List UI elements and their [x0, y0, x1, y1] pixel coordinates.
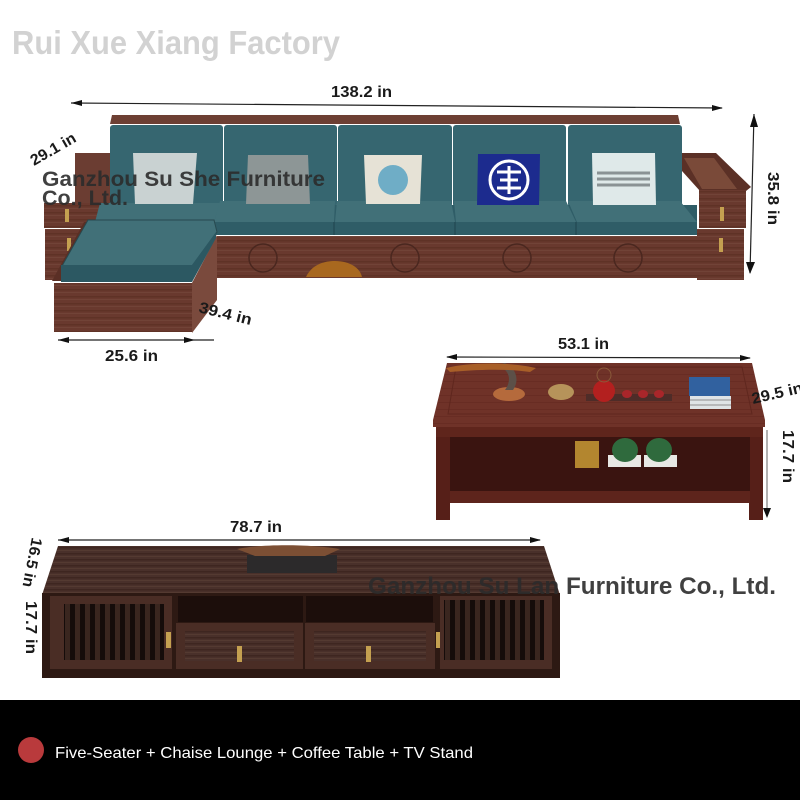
pillows — [133, 153, 656, 205]
stand top — [42, 546, 560, 595]
decorative shrub — [306, 261, 362, 277]
dimension: table depth: 29.5 in — [750, 380, 800, 408]
shelf objects — [575, 438, 677, 468]
tabletop objects — [446, 363, 731, 409]
watermark: Su She: Co., Ltd. — [42, 186, 128, 210]
watermark: Su She: Ganzhou Su She Furniture — [42, 167, 325, 191]
dimension: sofa height — [746, 114, 781, 274]
drawers — [166, 623, 441, 669]
sofa top rail — [110, 115, 680, 124]
left side table — [44, 153, 110, 280]
dimension: sofa depth: 29.1 in — [28, 130, 79, 169]
title: Rui Xue Xiang Factory — [12, 24, 341, 61]
seat cushions — [95, 201, 697, 235]
dimension: stand width — [58, 519, 541, 543]
coffee table — [433, 363, 765, 520]
decorative tray — [237, 545, 340, 573]
watermark: Su Lan: Ganzhou Su Lan Furniture Co., Ltd. — [368, 573, 776, 600]
watermark: Su She — [42, 167, 325, 210]
dimension: chaise width — [58, 337, 214, 365]
dimension: stand height: 17.7 in — [22, 601, 39, 654]
set description: Five-Seater + Chaise Lounge + Coffee Table + TV Stand — [55, 745, 473, 762]
dimension: sofa width: 138.2 in — [331, 84, 392, 101]
base medallions — [108, 244, 642, 323]
table top — [433, 363, 765, 427]
dimension: stand depth: 16.5 in — [19, 536, 45, 589]
stand front — [42, 593, 560, 678]
left door — [50, 596, 172, 669]
dimension: table width — [446, 336, 751, 361]
sofa illustration — [44, 115, 751, 333]
sofa wood base — [217, 236, 697, 278]
dimension: table width: 53.1 in — [558, 336, 609, 353]
right door — [440, 596, 552, 669]
right side table — [682, 153, 751, 280]
dimension: stand width: 78.7 in — [230, 519, 282, 536]
red dot — [18, 737, 44, 763]
dimension: chaise width: 25.6 in — [105, 348, 158, 365]
open compartments — [178, 596, 433, 622]
TV stand — [42, 545, 560, 678]
chaise lounge — [52, 220, 217, 333]
dimension: table height: 17.7 in — [779, 430, 796, 483]
dimension: chaise length: 39.4 in — [197, 299, 254, 329]
table legs and frame — [436, 425, 763, 520]
back cushions — [110, 125, 682, 207]
footer band — [0, 700, 800, 800]
dimension: table height — [763, 430, 796, 518]
dimension: sofa width — [71, 84, 723, 111]
dimension: sofa height: 35.8 in — [764, 172, 781, 225]
